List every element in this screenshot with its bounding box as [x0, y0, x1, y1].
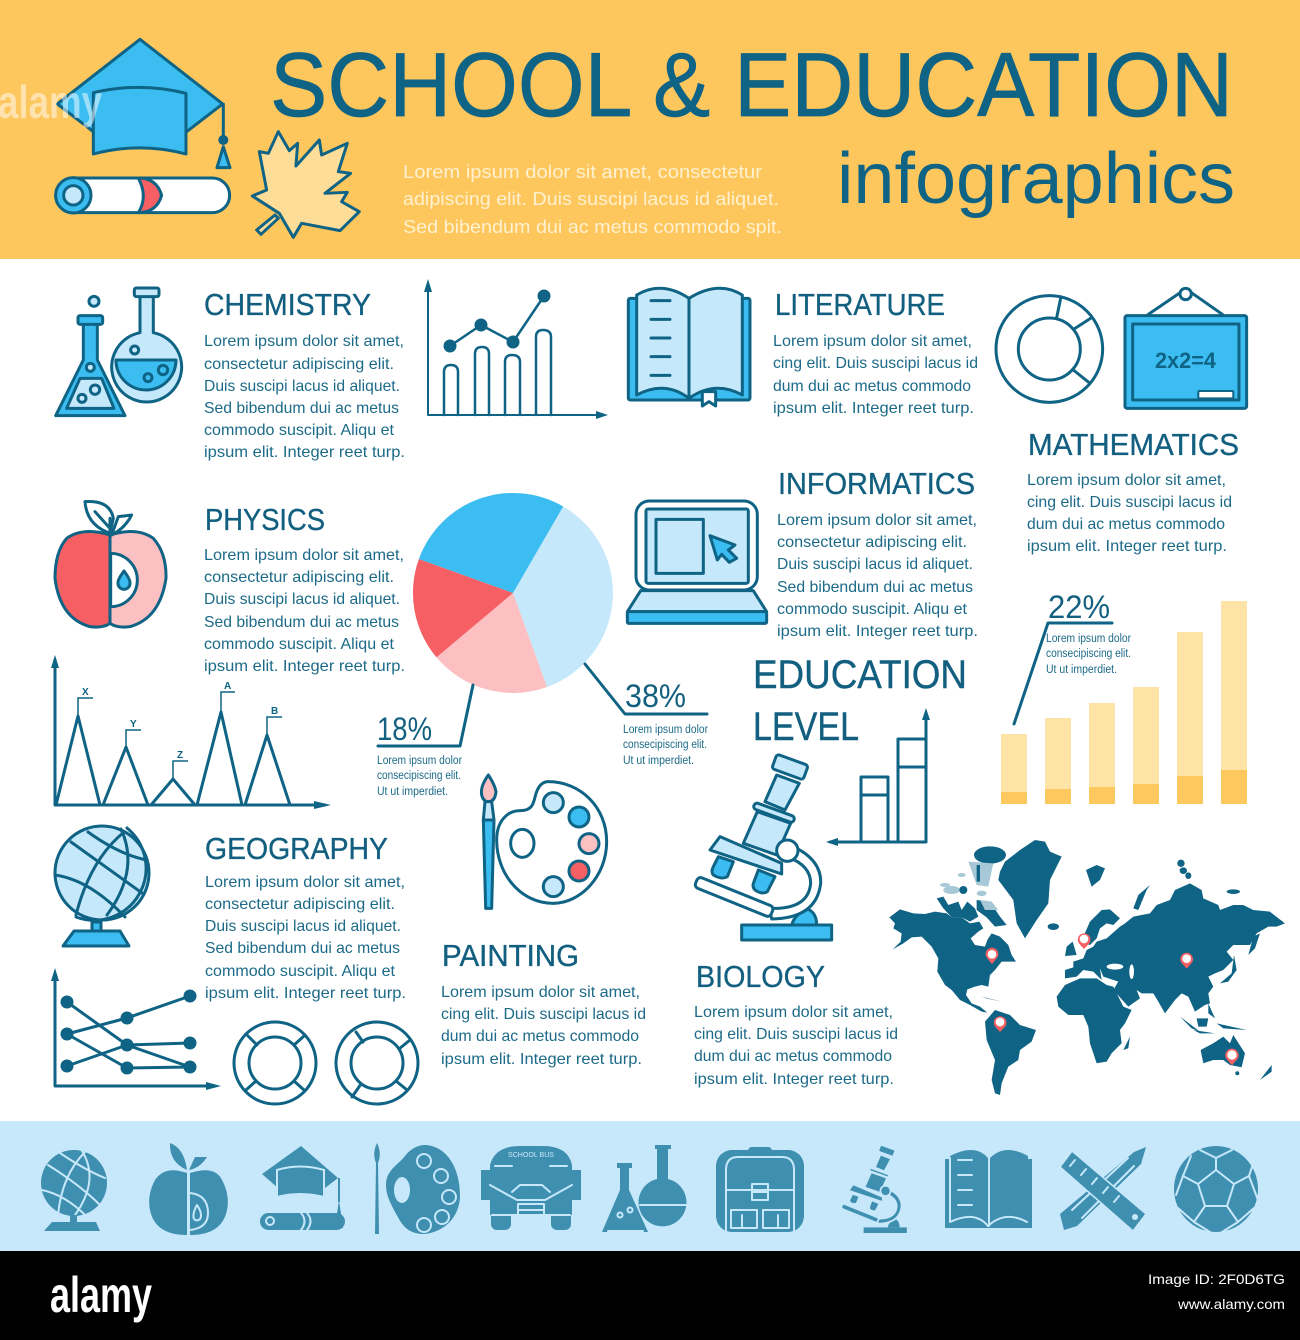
scandinavia [1083, 909, 1120, 945]
north america [889, 909, 1016, 1013]
title: SCHOOL & EDUCATION [270, 35, 1233, 136]
icon: graduation cap [57, 39, 230, 168]
heading: CHEMISTRY [204, 287, 371, 322]
body text: Duis suscipi lacus id aliquet. [204, 378, 400, 395]
body text [204, 333, 405, 461]
chart: pie [413, 493, 613, 693]
icon: apple [55, 502, 166, 627]
body text: Lorem ipsum dolor sit amet, [205, 874, 405, 891]
body text: Sed bibendum dui ac metus [777, 579, 973, 596]
body text: Sed bibendum dui ac metus [204, 614, 399, 631]
body text: dum dui ac metus commodo [773, 378, 971, 395]
chart: bars with line [424, 279, 608, 419]
body text [441, 984, 646, 1068]
heading: PHYSICS [205, 502, 325, 537]
south america and central links [982, 997, 1036, 1095]
callout: 18%: Lorem ipsum dolor [377, 755, 462, 767]
body text: ipsum elit. Integer reet turp. [1027, 538, 1227, 555]
icon: globe [41, 1150, 111, 1231]
intro text: Sed bibendum dui ac metus commodo spit. [403, 216, 782, 237]
panel: header banner [0, 0, 1300, 259]
heading: BIOLOGY [696, 959, 825, 994]
chart: ring [996, 296, 1103, 402]
body text: Lorem ipsum dolor sit amet, [204, 547, 404, 564]
body text: commodo suscipit. Aliqu et [205, 963, 396, 980]
icon: laptop [627, 501, 767, 623]
body text: Lorem ipsum dolor sit amet, [204, 333, 404, 350]
body text: Duis suscipi lacus id aliquet. [204, 591, 400, 608]
africa [1057, 978, 1132, 1063]
body text: ipsum elit. Integer reet turp. [204, 444, 405, 461]
intro text [403, 161, 782, 237]
chart: yellow bars with 22% callout: Ut ut imperdiet. [1046, 664, 1117, 676]
icon: school bus: SCHOOL BUS [508, 1150, 554, 1159]
body text: Lorem ipsum dolor sit amet, [1027, 472, 1226, 489]
chart: yellow bars with 22% callout: 22% [1048, 589, 1110, 625]
callout: 38%: Lorem ipsum dolor [623, 724, 708, 736]
icon: chalkboard [1125, 288, 1247, 408]
heading: GEOGRAPHY [205, 831, 388, 866]
body text: ipsum elit. Integer reet turp. [773, 400, 974, 417]
chart: yellow bars with 22% callout [1001, 589, 1247, 804]
icon: open book [628, 288, 750, 406]
body text: ipsum elit. Integer reet turp. [205, 985, 406, 1002]
inland seas [1107, 964, 1134, 979]
panel: geography [51, 826, 418, 1104]
chart: ring right [336, 1022, 418, 1104]
chart: column steps [826, 708, 930, 846]
body text [777, 512, 978, 640]
body text: cing elit. Duis suscipi lacus id [694, 1026, 898, 1043]
location pins [986, 933, 1239, 1065]
website: www.alamy.com [1177, 1296, 1285, 1312]
icon: book [945, 1150, 1032, 1228]
panel: literature [628, 287, 978, 417]
callout: 38%: 38% [625, 678, 686, 714]
icon: chalkboard: 2x2=4 [1155, 348, 1217, 373]
panel: mathematics [996, 288, 1247, 555]
icon: brush and palette [481, 775, 607, 908]
small islands [1048, 860, 1272, 1080]
chart: peaks [51, 655, 331, 809]
body text: Lorem ipsum dolor sit amet, [694, 1004, 893, 1021]
callout: 18%: consecipiscing elit. [377, 770, 461, 782]
footer bar [0, 1251, 1300, 1340]
body text: cing elit. Duis suscipi lacus id [773, 355, 978, 372]
body text: ipsum elit. Integer reet turp. [777, 623, 978, 640]
body text: dum dui ac metus commodo [694, 1048, 892, 1065]
chart: yellow bars with 22% callout: consecipiscing elit. [1046, 648, 1131, 660]
callout: 38% [585, 664, 708, 767]
chart: peaks: B [271, 706, 278, 717]
body text: consectetur adipiscing elit. [205, 896, 395, 913]
body text [1027, 472, 1232, 555]
icon: ruler and pencil [1060, 1147, 1146, 1231]
heading: MATHEMATICS [1028, 427, 1239, 462]
body text: Sed bibendum dui ac metus [204, 400, 399, 417]
body text: dum dui ac metus commodo [441, 1028, 639, 1045]
callout: 18%: Ut ut imperdiet. [377, 786, 448, 798]
panel: informatics [627, 466, 978, 640]
chart: peaks: Y [130, 719, 137, 730]
world map [889, 840, 1285, 1095]
body text: Lorem ipsum dolor sit amet, [773, 333, 972, 350]
body text [204, 547, 405, 675]
icon: school bus [481, 1146, 581, 1230]
icon: diploma scroll [56, 178, 230, 213]
subtitle: infographics [837, 139, 1235, 219]
panel: bottom icon strip [0, 1121, 1300, 1251]
heading line 2: LEVEL [753, 705, 859, 749]
body text: consectetur adipiscing elit. [204, 569, 394, 586]
eurasia [1065, 883, 1285, 1013]
callout: 18% [377, 685, 473, 798]
body text: ipsum elit. Integer reet turp. [694, 1071, 894, 1088]
body text: consectetur adipiscing elit. [777, 534, 967, 551]
icon: backpack [716, 1147, 804, 1232]
heading: INFORMATICS [778, 466, 975, 501]
body text: Duis suscipi lacus id aliquet. [205, 918, 401, 935]
intro text: adipiscing elit. Duis suscipi lacus id aliquet. [403, 188, 779, 209]
heading: PAINTING [442, 938, 579, 973]
panel: physics [51, 502, 405, 809]
heading: LITERATURE [775, 287, 945, 322]
chart: peaks: Z [177, 750, 183, 761]
chart: peaks: A [224, 681, 231, 692]
icon: brush and palette [374, 1143, 460, 1234]
icon: apple [149, 1143, 228, 1235]
callout: 38%: consecipiscing elit. [623, 739, 707, 751]
greenland [998, 840, 1062, 938]
body text [205, 874, 406, 1002]
watermark: alamy [0, 76, 102, 128]
body text: Lorem ipsum dolor sit amet, [777, 512, 977, 529]
arctic islands [937, 846, 1007, 927]
body text: commodo suscipit. Aliqu et [204, 422, 395, 439]
body text: Lorem ipsum dolor sit amet, [441, 984, 640, 1001]
heading: EDUCATION [753, 653, 967, 697]
icon: cap and scroll [260, 1146, 345, 1230]
panel: education level [753, 653, 967, 846]
body text [773, 333, 978, 417]
callout: 18%: 18% [377, 711, 432, 747]
intro text: Lorem ipsum dolor sit amet, consectetur [403, 161, 762, 182]
body text: Sed bibendum dui ac metus [205, 940, 400, 957]
icon: microscope [694, 754, 832, 940]
body text: cing elit. Duis suscipi lacus id [441, 1006, 646, 1023]
panel: biology [694, 754, 898, 1088]
panel: painting [441, 775, 646, 1068]
callout: 38%: Ut ut imperdiet. [623, 755, 694, 767]
logo: alamy [50, 1267, 152, 1323]
body text: commodo suscipit. Aliqu et [777, 601, 968, 618]
body text [694, 1004, 898, 1088]
icon: maple leaf [252, 132, 359, 237]
body text: ipsum elit. Integer reet turp. [204, 658, 405, 675]
body text: ipsum elit. Integer reet turp. [441, 1051, 642, 1068]
body text: dum dui ac metus commodo [1027, 516, 1225, 533]
body text: cing elit. Duis suscipi lacus id [1027, 494, 1232, 511]
body text: Duis suscipi lacus id aliquet. [777, 556, 973, 573]
icon: flasks [602, 1145, 686, 1232]
image id: Image ID: 2F0D6TG [1148, 1271, 1285, 1287]
body text: commodo suscipit. Aliqu et [204, 636, 395, 653]
chart: peaks: X [82, 687, 89, 698]
icon: globe [55, 826, 149, 946]
chart: ring left [234, 1022, 316, 1104]
icon: flasks [56, 288, 182, 416]
icon: microscope [841, 1145, 907, 1233]
chart: crossing lines [51, 968, 221, 1090]
panel: chemistry [56, 279, 608, 461]
chart: yellow bars with 22% callout: Lorem ipsum dolor [1046, 633, 1131, 645]
australia [1201, 1035, 1245, 1067]
icon: soccer ball [1174, 1146, 1258, 1232]
body text: consectetur adipiscing elit. [204, 356, 394, 373]
